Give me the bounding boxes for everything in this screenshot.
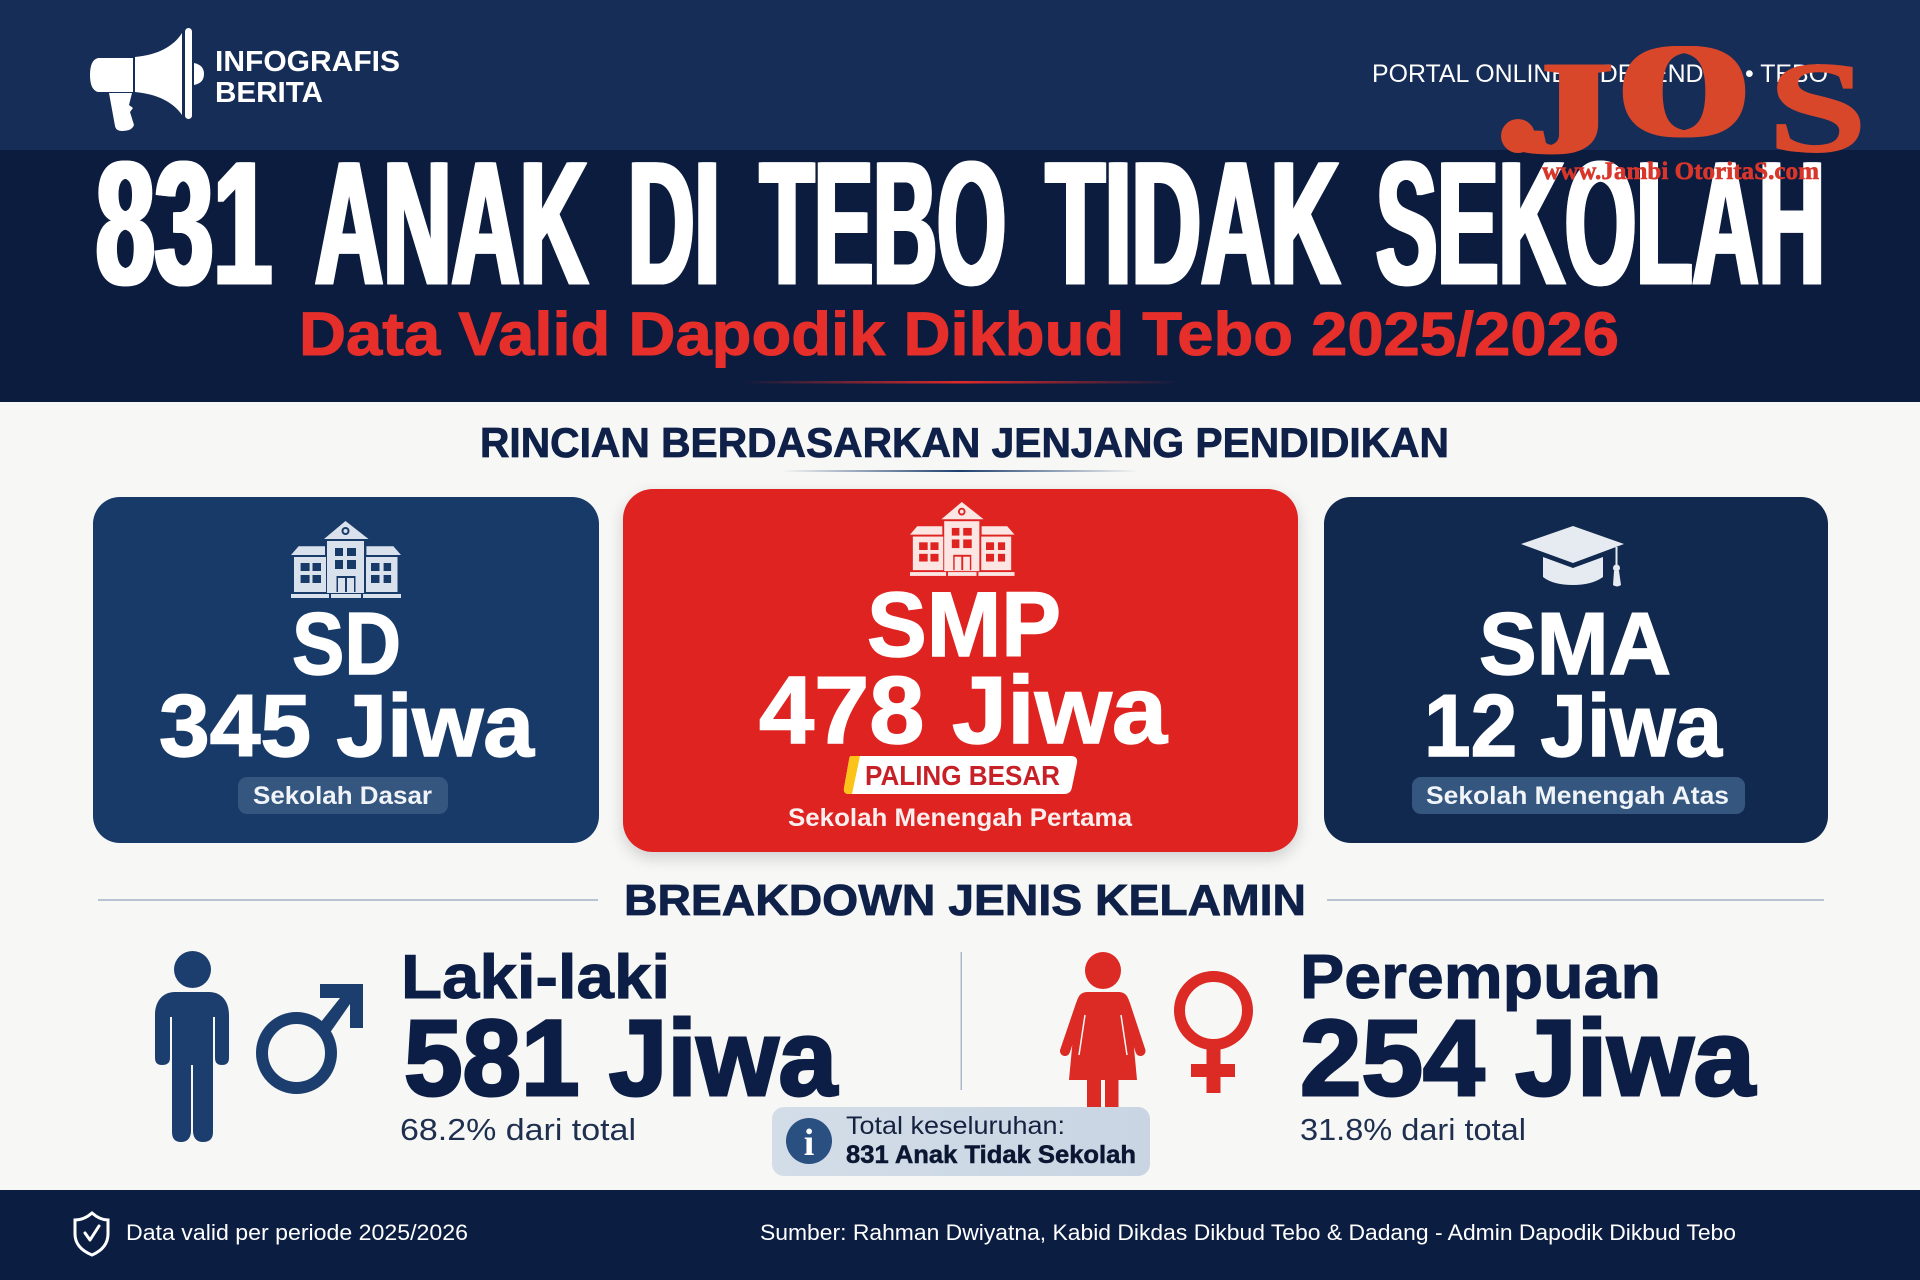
heading: rincian jenjang pendidikan: RINCIAN BERDASARKAN JENJANG PENDIDIKAN [480, 419, 1449, 466]
value: 254 Jiwa [1300, 997, 1756, 1118]
heading: breakdown jenis kelamin: BREAKDOWN JENIS KELAMIN [624, 876, 1306, 925]
logo: infografis berita [90, 28, 400, 131]
main title: DI [628, 126, 720, 322]
SMA label: SMA [1479, 594, 1671, 693]
logo text line 1: INFOGRAFIS [215, 46, 400, 78]
SMP value: 478 Jiwa [759, 657, 1168, 764]
icon: female figure [1065, 952, 1140, 1110]
label: Perempuan [1300, 943, 1661, 1012]
footer source: Sumber: Rahman Dwiyatna, Kabid Dikdas Dikbud Tebo & Dadang - Admin Dapodik Dikbud Tebo [760, 1220, 1736, 1245]
watermark: JOS logo: www.Jambi OtoritaS.com [1542, 158, 1819, 185]
SMP caption: Sekolah Menengah Pertama [788, 804, 1133, 832]
gender divider [960, 952, 962, 1090]
SD value: 345 Jiwa [159, 676, 535, 775]
subtitle underline [741, 381, 1181, 384]
logo text line 2: BERITA [215, 77, 323, 109]
watermark: JOS logo: J [1520, 34, 1608, 181]
SMA value: 12 Jiwa [1424, 676, 1723, 775]
SD pill [238, 777, 448, 814]
top header band [0, 0, 1920, 150]
main title: TEBO [760, 126, 1006, 322]
label: Laki-laki [401, 943, 670, 1012]
icon: graduation cap [1521, 526, 1624, 586]
icon: megaphone [90, 28, 204, 131]
SMP label: SMP [867, 574, 1061, 676]
watermark: JOS logo: S [1768, 36, 1867, 180]
value: 581 Jiwa [404, 997, 838, 1118]
main title: TIDAK [1046, 126, 1340, 322]
share: 68.2% dari total [400, 1112, 636, 1147]
icon: male symbol [262, 984, 363, 1088]
panel: laki-laki [155, 943, 838, 1147]
SMA pill: Sekolah Menengah Atas [1426, 782, 1729, 810]
SD label: SD [292, 594, 401, 693]
watermark: JOS logo [1501, 16, 1867, 185]
main title: ANAK [315, 126, 588, 322]
icon: female symbol [1180, 976, 1248, 1093]
heading underline [781, 470, 1139, 472]
watermark: JOS logo: O [1622, 16, 1746, 166]
panel: SD [93, 497, 599, 843]
icon: info [786, 1118, 832, 1164]
SMA pill [1412, 777, 1745, 814]
panel: SMP [623, 489, 1298, 858]
icon: male figure [155, 951, 229, 1142]
icon: school building [291, 521, 401, 598]
title band [0, 150, 1920, 402]
main title: 831 [96, 126, 272, 322]
callout line 1: Total keseluruhan: [846, 1112, 1065, 1140]
share: 31.8% dari total [1300, 1112, 1526, 1147]
main title [96, 126, 1825, 322]
footer validity note: Data valid per periode 2025/2026 [126, 1220, 468, 1245]
icon: school building [910, 502, 1014, 576]
panel: perempuan [1065, 943, 1756, 1147]
footer band [0, 1190, 1920, 1280]
subtitle: Data Valid Dapodik Dikbud Tebo 2025/2026 [299, 300, 1619, 368]
callout line 2: 831 Anak Tidak Sekolah [846, 1141, 1136, 1169]
header tagline: PORTAL ONLINE INDEPENDEN • TEBO [1372, 60, 1828, 88]
icon: shield check [75, 1213, 108, 1255]
callout: total keseluruhan [772, 1107, 1150, 1176]
icon: info: i [804, 1122, 814, 1164]
panel: SMA [1324, 497, 1828, 843]
badge: paling besar: PALING BESAR [865, 760, 1060, 791]
SD pill: Sekolah Dasar [253, 782, 432, 810]
